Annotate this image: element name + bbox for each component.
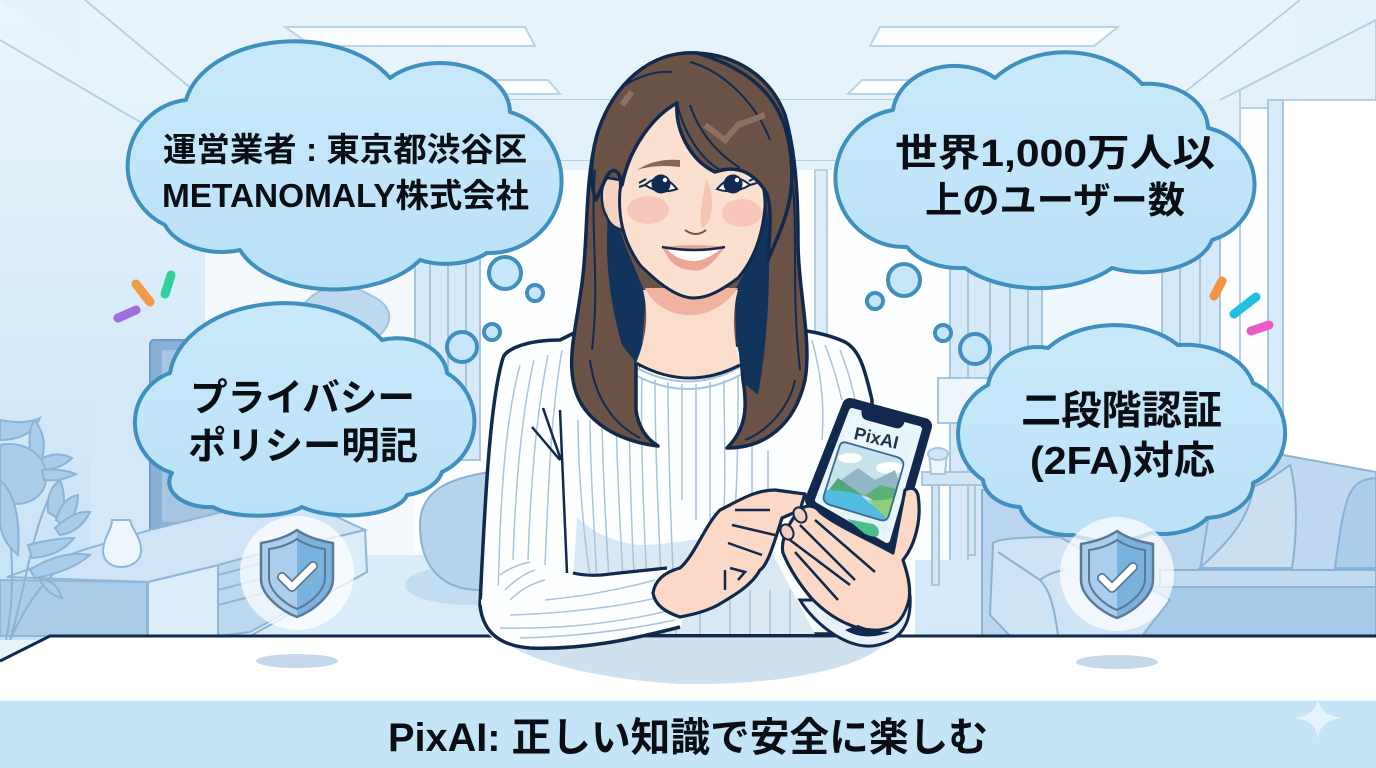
plant behind cloud: [300, 287, 389, 335]
bangs: [592, 53, 792, 260]
ear: [602, 178, 622, 230]
ceiling beams: [0, 0, 1376, 160]
footer title: PixAI: 正しい知識で安全に楽しむ: [388, 716, 988, 760]
footer band: [0, 698, 1376, 768]
right floor: [915, 560, 1376, 636]
vase: [103, 520, 141, 567]
left forearm: [480, 562, 690, 648]
sweater body: [480, 330, 872, 634]
thought bubbles right: [867, 264, 990, 364]
company text: 運営業者 : 東京都渋谷区: [163, 131, 527, 168]
cloud: privacy: [135, 303, 474, 516]
users text: 上のユーザー数: [925, 180, 1185, 221]
cloud: users: [835, 52, 1255, 288]
privacy text: [188, 378, 418, 468]
phone: [813, 406, 924, 545]
center windows: [205, 170, 1265, 640]
sweater ribs: [498, 340, 855, 634]
eyes: [639, 174, 757, 194]
left floor: [250, 555, 520, 636]
shadow right shield: [1076, 655, 1158, 669]
blush: [627, 196, 669, 224]
phone green button: [847, 519, 879, 537]
right cuff: [800, 595, 910, 646]
hair shadow: [607, 195, 646, 368]
users text: [895, 133, 1215, 221]
icon: shield right: [1060, 517, 1174, 631]
left wall: [0, 0, 205, 640]
curtains: [415, 210, 1220, 590]
users text: 世界1,000万人以: [895, 133, 1215, 175]
phone app title: PixAI: [852, 423, 901, 453]
television: [150, 340, 260, 536]
cup: [929, 452, 947, 474]
privacy text: ポリシー明記: [188, 426, 418, 468]
icon: shield left: [240, 516, 354, 630]
company text: [162, 131, 529, 214]
sparkle marks right: [1214, 281, 1269, 331]
woman: [480, 53, 924, 648]
company text: METANOMALY株式会社: [162, 177, 529, 214]
sofa: [982, 455, 1376, 636]
plant: [0, 418, 90, 640]
hand left: [653, 490, 805, 617]
cloud: two factor: [958, 325, 1285, 541]
phone scenery image: [824, 443, 902, 520]
two factor text: [1021, 389, 1222, 483]
back hair: [572, 53, 807, 448]
privacy text: プライバシー: [190, 378, 415, 420]
cloud: company: [128, 41, 562, 289]
footer star: [1294, 698, 1342, 738]
sideboard cabinet: [0, 495, 367, 636]
sparkle marks left: [118, 275, 171, 318]
sweater lower shade: [570, 517, 815, 634]
ceiling: [85, 0, 1295, 100]
shadow left shield: [256, 654, 338, 668]
nose: [701, 178, 712, 228]
ceiling lights: [285, 27, 1118, 94]
sleeve fold lines: [532, 408, 567, 573]
eyebrows: [637, 160, 680, 170]
beanbag: [405, 470, 535, 605]
left wall panel: [90, 377, 210, 577]
mouth: [662, 245, 725, 271]
hair strands: [590, 62, 800, 440]
table: [0, 636, 1376, 700]
side table and lamp: [922, 378, 990, 585]
thought bubbles left: [447, 257, 543, 362]
two factor text: 二段階認証: [1021, 389, 1222, 433]
collar: [633, 367, 742, 389]
shadow under arms: [500, 638, 890, 684]
two factor text: (2FA)対応: [1030, 440, 1215, 483]
neck: [636, 290, 740, 380]
face: [620, 95, 765, 298]
hand right: [782, 488, 919, 630]
